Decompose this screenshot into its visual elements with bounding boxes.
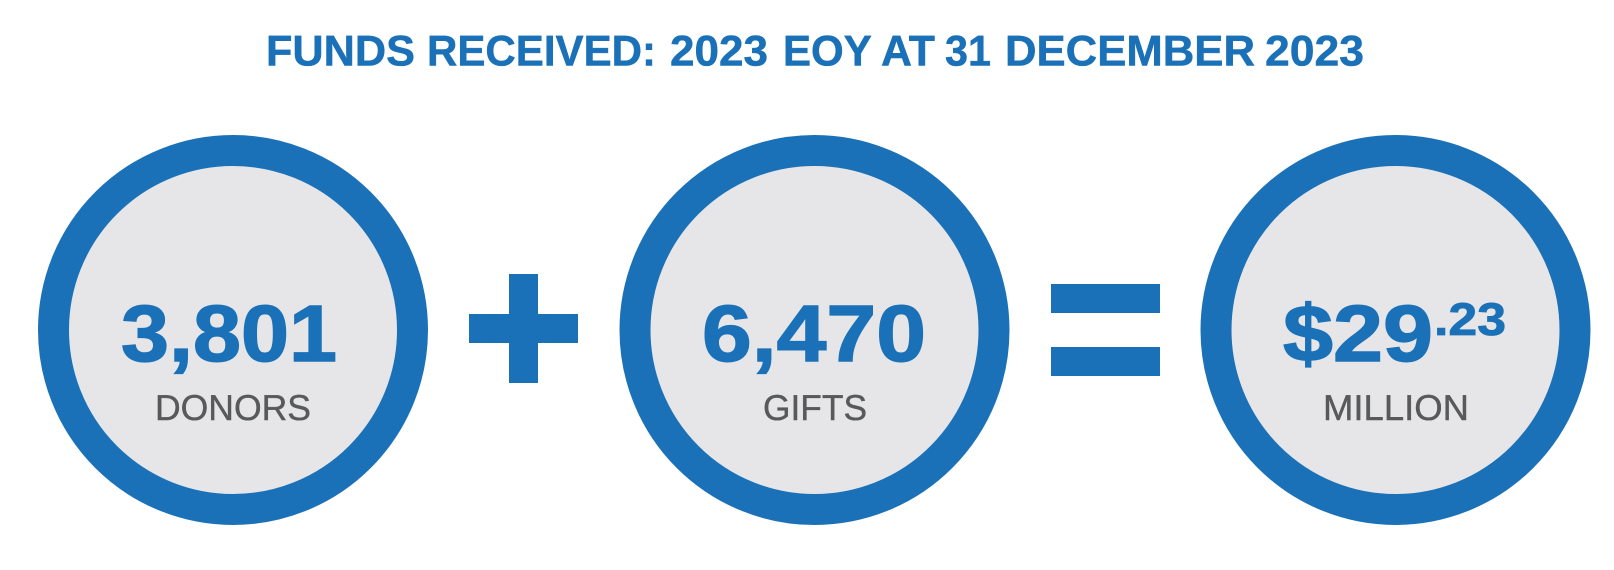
donors number: 3,801: [121, 289, 337, 378]
amount label: MILLION: [1323, 387, 1469, 428]
title: 2023: [1265, 28, 1364, 76]
icon: equals sign: [1051, 284, 1160, 376]
title: EOY: [783, 28, 871, 76]
title: FUNDS: [266, 28, 415, 76]
gifts number: 6,470: [702, 289, 926, 378]
title: 2023: [670, 28, 768, 76]
panel: donors circle: [54, 150, 412, 510]
panel: gifts circle: [635, 150, 994, 510]
title: 31: [945, 28, 991, 76]
title: AT: [881, 28, 935, 76]
amount decimals: .23: [1434, 293, 1506, 345]
icon: plus sign: [469, 274, 578, 383]
title: DECEMBER: [1005, 28, 1255, 76]
title: RECEIVED:: [427, 28, 656, 76]
gifts label: GIFTS: [763, 387, 867, 428]
panel: amount circle: [1216, 150, 1575, 510]
amount number: $29: [1283, 289, 1433, 378]
donors label: DONORS: [155, 387, 311, 428]
